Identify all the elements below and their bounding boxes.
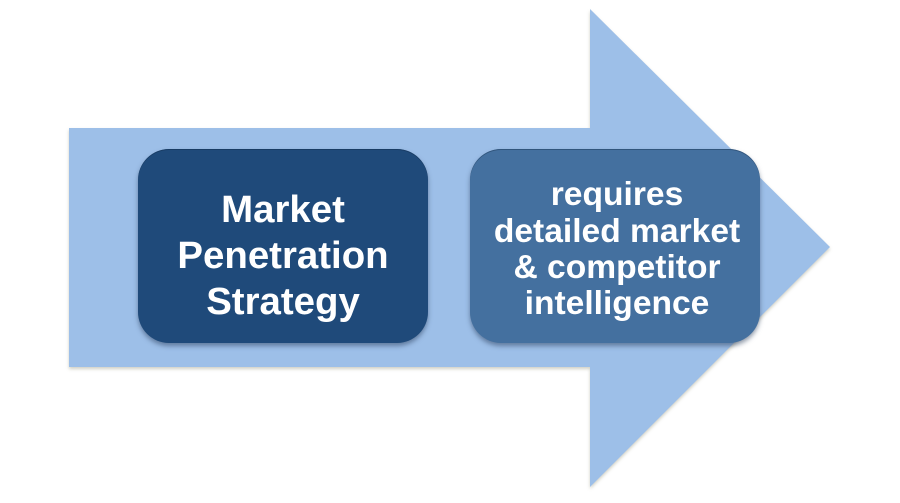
label line 2: Penetration [177,234,389,277]
text line 1: requires [551,176,683,213]
label line 3: Strategy [206,280,360,323]
text line 3: & competitor [513,249,721,286]
label line 1: Market [221,188,345,231]
text line 4: intelligence [525,285,709,322]
box: requires intelligence [470,149,760,343]
box: market penetration strategy [138,149,428,343]
text line 2: detailed market [494,213,740,250]
